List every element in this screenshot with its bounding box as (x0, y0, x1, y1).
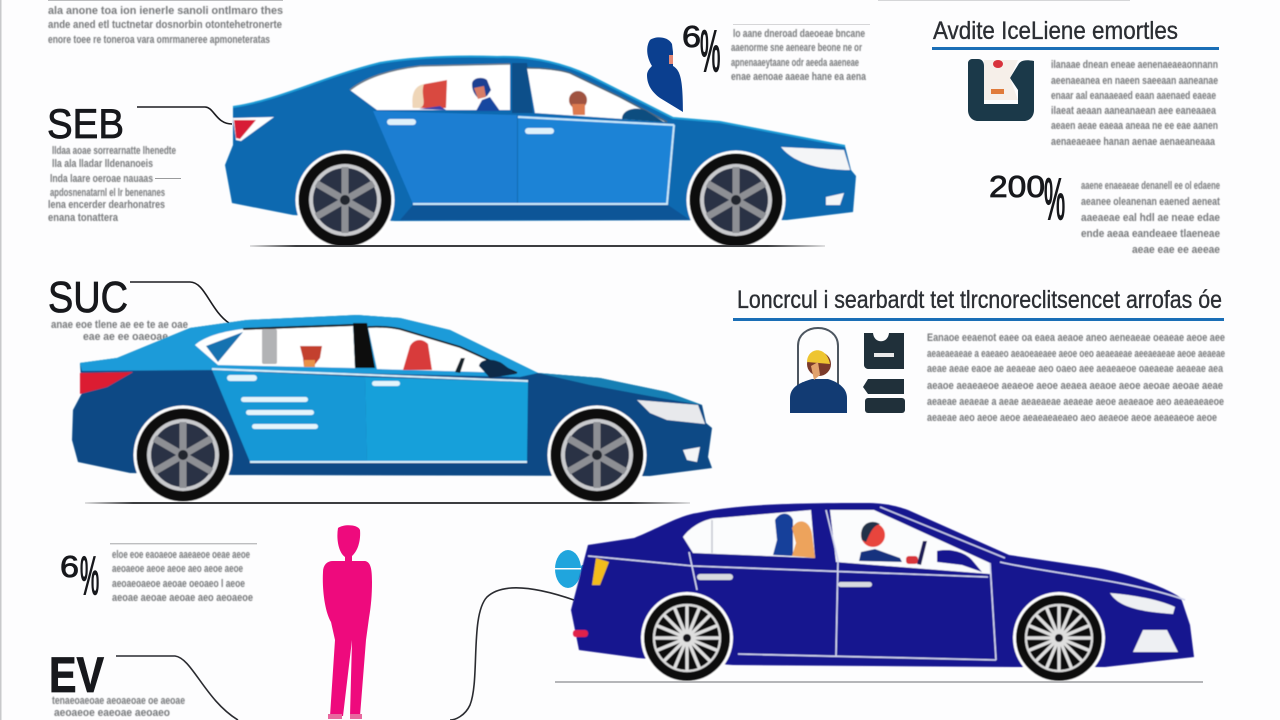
rear quarter glass (206, 332, 243, 362)
stat: 200%: 200 (989, 169, 1045, 204)
text block: top right description: aeaen aeae eaeaa aneaa ne ee eae aanen (1051, 120, 1218, 132)
steering wheel (455, 358, 465, 373)
wheel arches (641, 592, 1105, 684)
text block: SEB description: lldaa aoae sorrearnatte lhenedte (52, 145, 176, 157)
text block: 200% description: aeanee oleanenan eaened aeneat (1081, 196, 1220, 208)
text block: 200% description: aaene enaeaeae denanell ee ol edaene (1081, 180, 1220, 192)
text block: SEB description (48, 145, 181, 224)
passengers (412, 78, 587, 115)
text block: top right description: ilaeat aeaan aaneanaean aee eaneaaea (1051, 105, 1217, 117)
heading: top right: Avdite IceLiene emortles (933, 17, 1178, 45)
rear reflector (573, 630, 588, 637)
front window frame (527, 68, 667, 122)
door pillar (512, 63, 533, 113)
person: pink figure (323, 525, 372, 719)
stat: top 6%: 6 (682, 19, 701, 54)
driver (859, 522, 927, 565)
text block: EV description (52, 695, 185, 719)
stat: 200% (989, 165, 1065, 232)
rear window (195, 325, 355, 368)
wheels (136, 408, 644, 502)
fog light (1133, 630, 1178, 652)
connector: SUC to car (130, 282, 229, 323)
label: SEB: SEB (47, 100, 124, 147)
text block: middle right description: aeaeae aeo aeoe aeoe aeaeaeaeaeo aeo aeaeoe aeoe aeaeaeoe aeoe (927, 412, 1217, 424)
text block: bottom 6% description: aeoaeoe aeoe aeoe aeo aeoe aeoe (112, 563, 243, 575)
stat: bottom 6%: 6 (60, 549, 79, 584)
rear window divider (711, 520, 713, 553)
text block: SUC description (51, 319, 188, 343)
text block: SUC description: anae eoe tlene ae ee te ae oae (51, 319, 188, 331)
tail light (592, 558, 609, 585)
car 3: dark blue electric sedan (571, 503, 1194, 684)
text block: SEB description: enana tonattera (48, 212, 119, 224)
text block: top 6% description: aaenorme sne aeneare beone ne or (731, 42, 863, 54)
mirror (479, 360, 516, 378)
door handles (697, 574, 872, 587)
text block: 200% description (1081, 180, 1220, 256)
text block: top 6% description: lo aane dneroad daeoeae bncane (733, 28, 865, 40)
headlight (637, 400, 705, 424)
wheels (644, 595, 1102, 681)
fog light (683, 447, 700, 462)
text block: SEB description: lena encerder dearhonatres (48, 199, 165, 211)
connector: EV to cable (116, 656, 238, 720)
charging cable (450, 588, 574, 720)
text block: bottom 6% description: aeoae aeoae aeoae aeo aeoaeoe (112, 592, 253, 604)
front window (368, 327, 517, 373)
ground line 2 (85, 502, 690, 504)
door trim (413, 117, 674, 204)
car 2: light blue and navy sedan (72, 315, 712, 504)
text block: bottom 6% description: aeoaeoaeoe aeoae oeoaeo l aeoe (112, 578, 245, 590)
text block: bottom 6% description: eloe eoe eaoaeoe aaeaeoe oeae aeoe (112, 549, 250, 561)
stat: top 6%: % (700, 20, 720, 84)
text block: SEB description: apdosnenatarnl el lr benenanes (50, 187, 165, 199)
label: SUC: SUC (48, 273, 128, 322)
door pillar (353, 323, 375, 368)
wheels (298, 154, 782, 246)
stat: bottom 6% (60, 545, 99, 606)
door lines (588, 510, 1185, 660)
text block: EV description: aeoaeoe eaeoae aeoaeo (54, 707, 170, 719)
windshield strip (880, 507, 1005, 558)
mirror (937, 550, 982, 572)
mirror (622, 109, 664, 122)
door stripes (241, 397, 318, 429)
rear door (212, 370, 367, 462)
wheel arches (296, 150, 786, 250)
text block: top left intro: enore toee re toneroa vara omrmaneree apmoneteratas (48, 34, 270, 46)
roof panel (80, 315, 538, 377)
text block: top right description: aeenaeanea en naeen saeeaan aaneanae (1051, 75, 1218, 87)
text block: top 6% description: enae aenoae aaeae hane ea aena (731, 71, 867, 83)
rear door (373, 111, 517, 204)
door handles (387, 119, 554, 134)
text block: EV description: tenaeoaeoae aeoaeoae oe aeoae (52, 695, 185, 707)
rear window frame (350, 64, 510, 90)
headlight (781, 147, 850, 170)
door handles (227, 375, 400, 386)
car 1: blue sedan (225, 57, 856, 249)
text block: top right description (1051, 59, 1218, 148)
label: EV: EV (49, 647, 105, 703)
car 3 body (571, 503, 1194, 667)
text block: top 6% description (731, 24, 870, 83)
tail light (80, 372, 133, 394)
text block: 200% description: ende aeaa eandeaee tlaeneae (1081, 228, 1220, 240)
hood highlight (538, 373, 702, 405)
front window frame (368, 327, 517, 373)
heading rule: middle right (733, 318, 1224, 321)
text block: top left intro: ande aned etl tuctnetar dosnorbin otontehetronerte (48, 19, 282, 31)
front door (365, 377, 528, 463)
text block: SUC description: eae ae ee oaeoae (83, 331, 168, 343)
lower sill (400, 205, 690, 220)
car 2 body (72, 315, 712, 476)
icon: charging plug (555, 550, 586, 588)
connector: SEB to car (137, 107, 232, 124)
stat: 200%: % (1044, 165, 1065, 232)
gray pillar (262, 329, 277, 364)
text block: SEB description: lla ala lladar lldenanoeis (52, 158, 153, 170)
car 1 body (225, 57, 856, 221)
ground line 3 (555, 681, 1203, 683)
text block: middle right description: Eanaoe eeaenot eaee oa eaea aeaoe aneo aeneaeae oeaeae aeoe aee (927, 332, 1225, 344)
headlight (1110, 593, 1175, 614)
text block: SEB description: lnda laare oeroae nauaas (50, 173, 153, 185)
rear passengers (773, 514, 815, 558)
roof highlight (233, 57, 845, 146)
text block: 200% description: aaeaeae eal hdl ae neae edae (1081, 212, 1220, 224)
text block: bottom 6% description (110, 543, 257, 604)
tail light (233, 117, 274, 141)
text block: top right description: aenaeaeaee hanan aenae aenaeaneaaa (1051, 136, 1216, 148)
icon: dark bracket with light (968, 59, 1034, 121)
text block: top 6% description: apnenaaeytaane odr aeeda aaeneae (731, 57, 859, 69)
rear window (350, 64, 510, 110)
rear window frame (243, 325, 353, 329)
text block: top left intro (48, 5, 283, 46)
text block: middle right description: aeaoe aeaeaeoe aeaeoe aeoe aeaea aeaoe aeoe aeoae aeoae aeae (927, 380, 1223, 392)
icon: person in arch (790, 328, 847, 413)
text block: top right description: enaar aal eanaaeaed eaan aaenaed eaeae (1051, 90, 1216, 102)
passengers (300, 340, 432, 370)
stat: top 6% (682, 19, 720, 84)
text block: 200% description: aeae eae ee aeeae (1132, 244, 1220, 256)
front window (527, 68, 667, 122)
text block: middle right description (927, 332, 1225, 424)
standing person: navy (647, 37, 683, 112)
icon: stacked dark tools (863, 333, 905, 413)
heading rule: top right (932, 47, 1219, 50)
wheel arches (134, 406, 646, 504)
front window (830, 510, 990, 574)
door trim (212, 369, 528, 462)
stat: bottom 6%: % (80, 545, 99, 606)
text block: top right description: ilanaae dnean eneae aenenaeaeaonnann (1051, 59, 1218, 71)
text block: top left intro: ala anone toa ion ienerle sanoli ontlmaro thes (48, 5, 283, 17)
rear window (683, 510, 815, 558)
front door (518, 115, 675, 205)
ground line 1 (250, 245, 825, 247)
fog light (826, 193, 844, 205)
